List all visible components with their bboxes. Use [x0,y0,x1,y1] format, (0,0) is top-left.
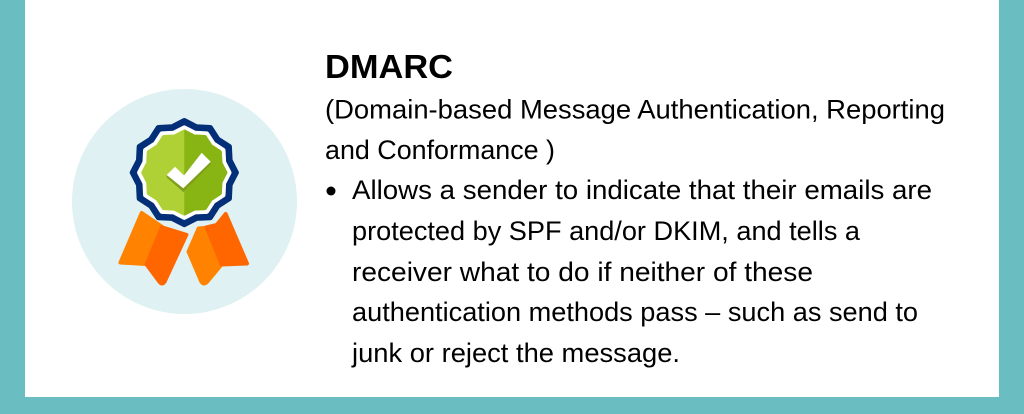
icon background circle [72,89,297,314]
badge seal [132,121,236,225]
heading: DMARC [325,49,453,86]
bullet description [326,175,932,368]
bullet marker [326,186,336,196]
right ribbon [188,214,247,284]
bullet description: authentication methods pass – such as send to [352,297,918,327]
bullet description: receiver what to do if neither of these [352,257,813,287]
icon: check mark [167,153,211,192]
bullet description: protected by SPF and/or DKIM, and tells a [352,216,860,246]
bullet description: junk or reject the message. [351,338,680,368]
subtitle: expanded name [325,94,945,165]
subtitle: expanded name: (Domain-based Message Authentication, Reporting [325,94,945,124]
left ribbon [120,213,187,284]
subtitle: expanded name: and Conformance ) [325,135,555,165]
icon: award badge [72,89,297,314]
bullet description: Allows a sender to indicate that their emails are [352,175,932,205]
